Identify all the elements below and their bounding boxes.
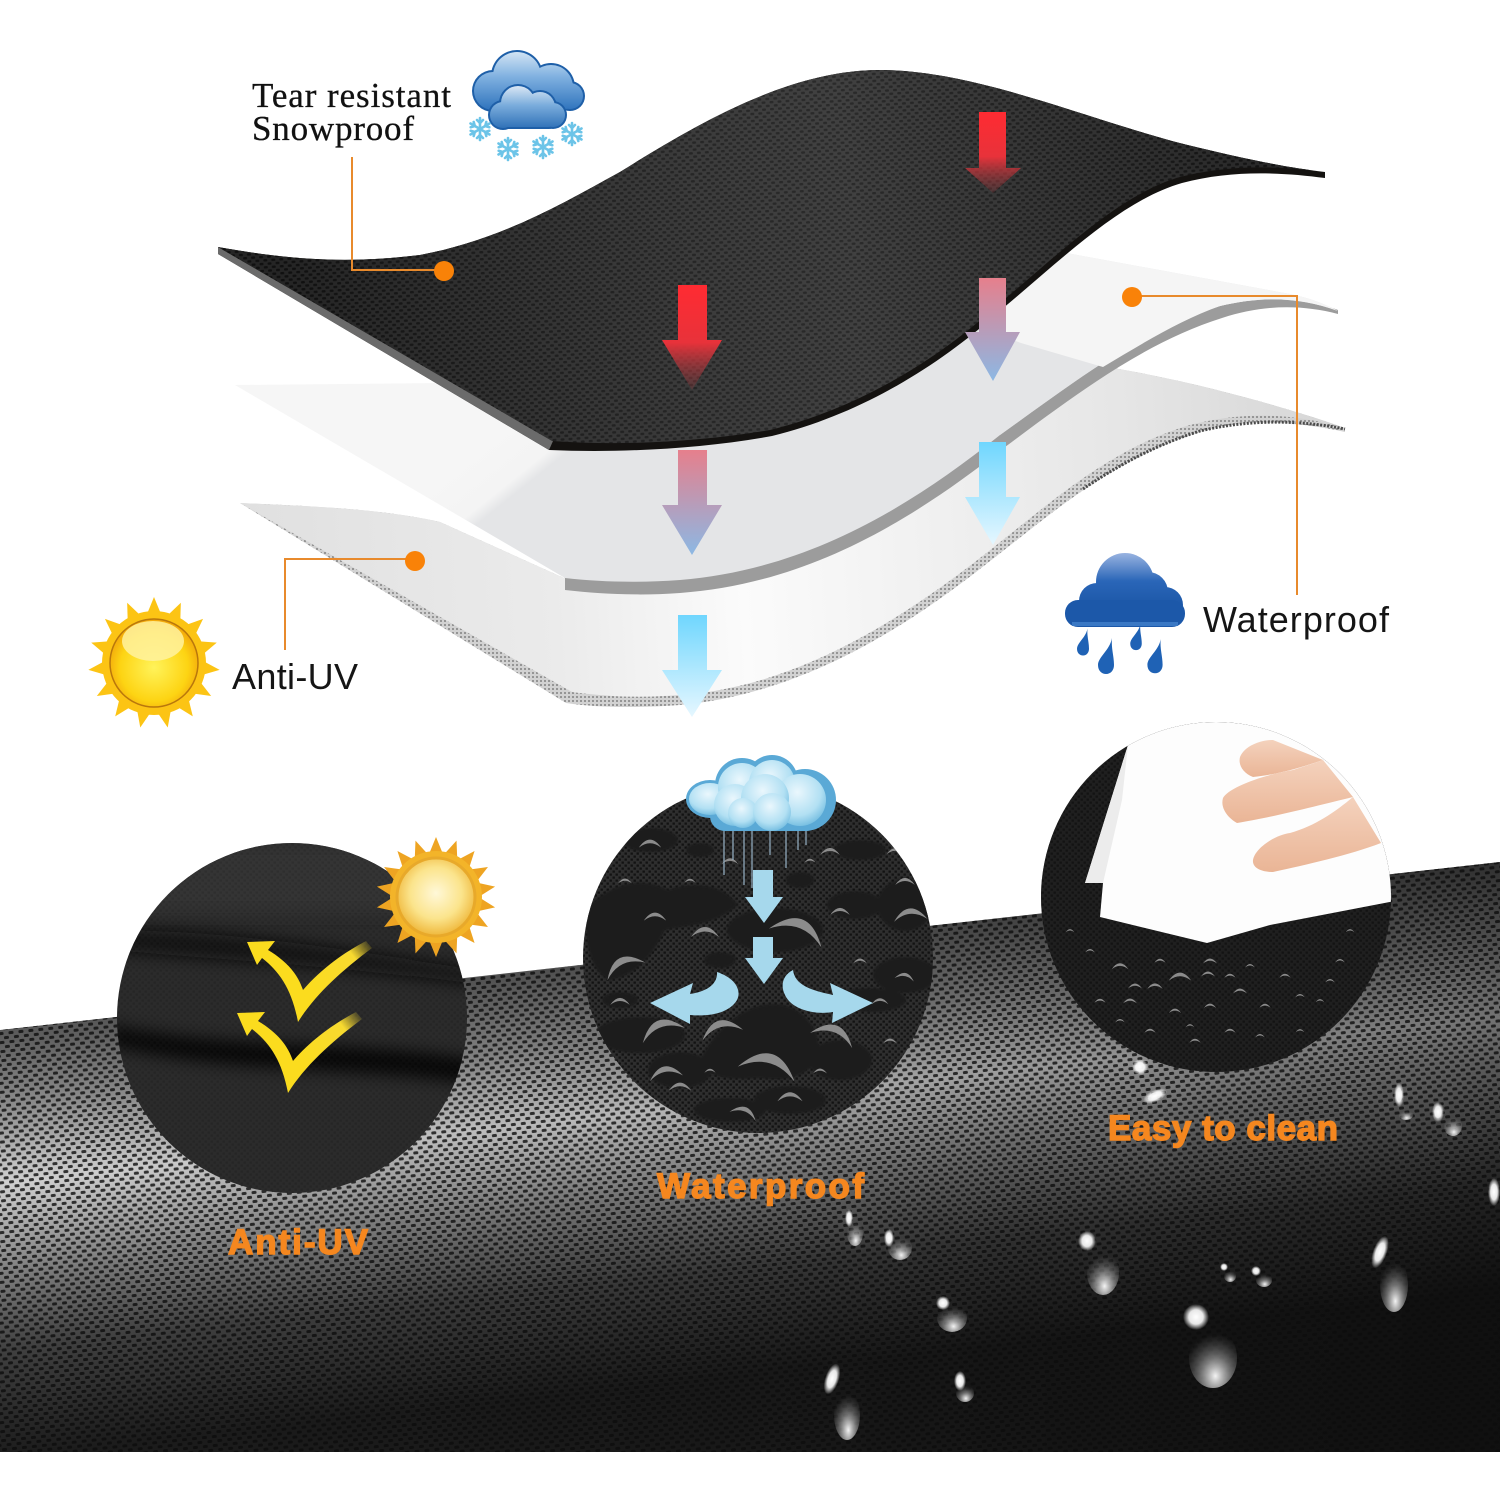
arrow: pink to blue centre: [662, 450, 722, 555]
label: waterproof: Waterproof: [1203, 599, 1390, 640]
icon: snow cloud: [470, 50, 585, 160]
label: anti-UV: Anti-UV: [232, 656, 358, 697]
circle: anti-UV fabric: [110, 843, 480, 1193]
icon: rain cloud: [1065, 553, 1185, 674]
arrow: red centre: [662, 285, 722, 390]
icon: sun on fabric: [375, 837, 497, 957]
connector: waterproof: [1122, 287, 1297, 595]
arrow: red top right: [965, 112, 1021, 193]
icon: blue flow arrows: [650, 870, 873, 1024]
circle: waterproof fabric with droplets: [583, 783, 937, 1133]
icon: sun: [87, 597, 221, 729]
label: Waterproof: Waterproof: [657, 1167, 864, 1206]
label: Easy to clean: Easy to clean: [1108, 1109, 1338, 1148]
label: Anti-UV: Anti-UV: [228, 1223, 369, 1262]
arrow: cyan right: [965, 442, 1020, 545]
top sheet: tear resistant layer: [218, 70, 1325, 451]
water droplets on fabric: [820, 1059, 1500, 1440]
arrow: cyan centre: [662, 615, 722, 717]
connector: anti-UV: [285, 551, 425, 650]
label: tear resistant snowproof: Snowproof: [252, 109, 414, 148]
lower sheet: anti-UV layer: [240, 366, 1345, 707]
icon: yellow checkmarks: [237, 941, 372, 1093]
icon: cloud with rain: [686, 755, 836, 888]
middle sheet: waterproof layer: [235, 240, 1338, 594]
bottom fabric band: [0, 862, 1500, 1452]
label: tear resistant snowproof: Tear resistant: [252, 76, 451, 115]
circle: easy to clean with tissue and fingers: [1041, 720, 1400, 1072]
connector: tear resistant: [352, 157, 454, 281]
arrow: pink to blue right: [965, 278, 1020, 381]
